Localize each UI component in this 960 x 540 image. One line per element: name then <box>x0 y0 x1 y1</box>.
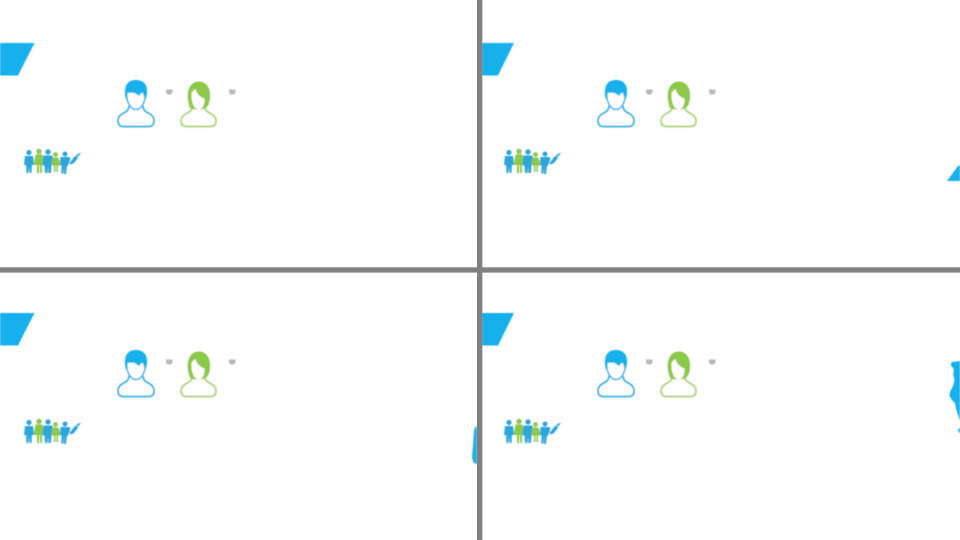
icon: man avatar bottom-left <box>118 350 154 396</box>
icon: grey marker after woman top-left <box>229 90 236 94</box>
icon: woman avatar top-left <box>181 82 216 126</box>
icon: grey marker after woman bottom-right <box>709 360 716 364</box>
icon: man avatar bottom-right <box>598 350 634 396</box>
icon: woman avatar bottom-left <box>181 352 216 396</box>
panel: bottom-right frame <box>482 313 960 444</box>
banner: blue parallelogram top-right <box>482 43 514 76</box>
icon: man avatar top-left <box>118 80 154 126</box>
icon: grey marker after woman bottom-left <box>229 360 236 364</box>
icon: grey marker after man top-right <box>646 90 652 94</box>
banner: blue parallelogram bottom-right <box>482 313 514 346</box>
icon: woman avatar top-right <box>661 82 696 126</box>
icon: man avatar top-right <box>598 80 634 126</box>
panel: top-left frame <box>0 43 236 174</box>
shape: blue blob at panel edge <box>472 426 477 464</box>
icon: crowd of people top-left <box>24 149 81 174</box>
icon: crowd of people bottom-left <box>24 419 81 444</box>
icon: grey marker after woman top-right <box>709 90 716 94</box>
panel: top-right frame <box>482 43 960 181</box>
icon: grey marker after man bottom-right <box>646 360 652 364</box>
icon: woman avatar bottom-right <box>661 352 696 396</box>
icon: grey marker after man top-left <box>166 90 172 94</box>
shape: blue map-like blob at right edge <box>950 361 960 433</box>
panel: bottom-left frame <box>0 313 477 464</box>
shape: blue triangle entering at right edge <box>947 165 960 181</box>
banner: blue parallelogram bottom-left <box>0 313 34 346</box>
banner: blue parallelogram top-left <box>0 43 34 76</box>
icon: grey marker after man bottom-left <box>166 360 172 364</box>
icon: crowd of people bottom-right <box>504 419 561 444</box>
icon: crowd of people top-right <box>504 149 561 174</box>
